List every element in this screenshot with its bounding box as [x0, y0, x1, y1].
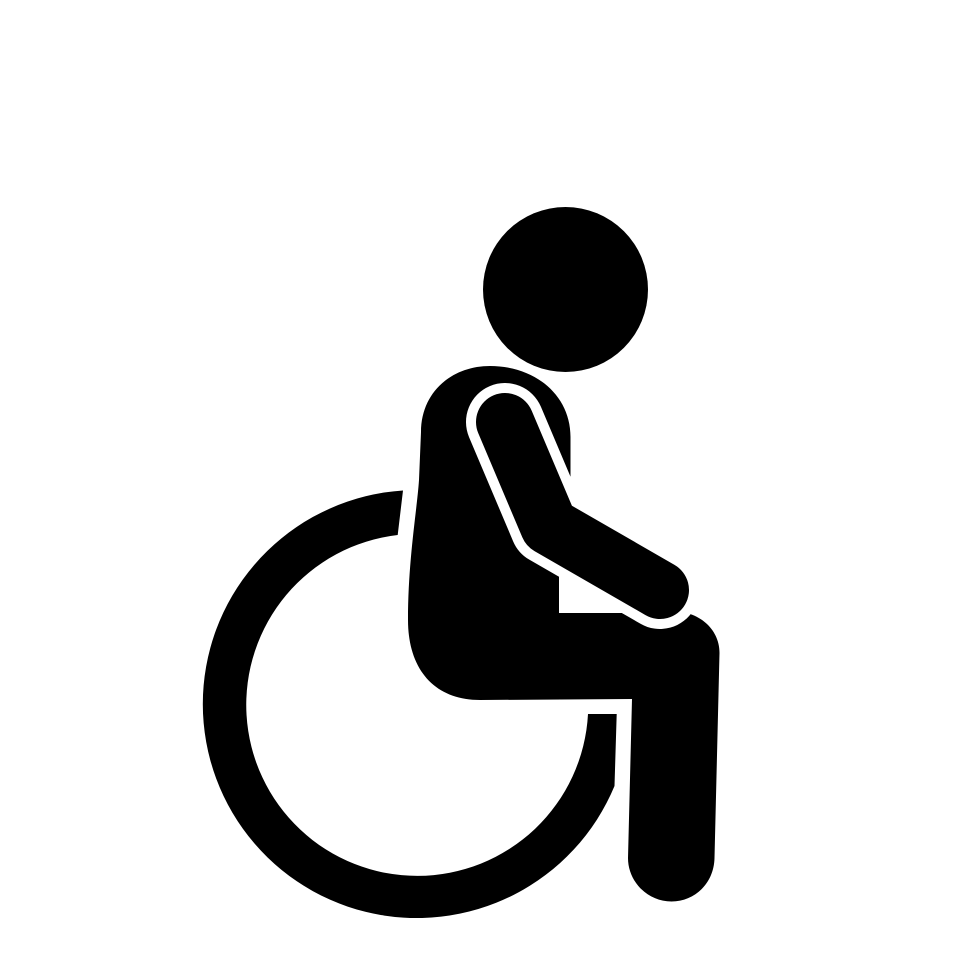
arm	[505, 422, 660, 590]
arm outline	[505, 422, 660, 590]
head	[483, 207, 648, 372]
torso and leg	[408, 366, 720, 902]
wheel	[203, 490, 617, 918]
